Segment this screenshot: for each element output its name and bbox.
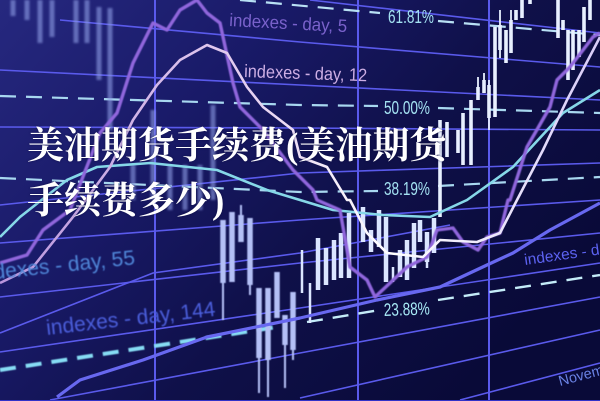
label: indexes day 12: indexes - day, 12 xyxy=(244,61,367,85)
candlesticks centre xyxy=(302,207,434,323)
label: 61.81%: 61.81% xyxy=(388,7,434,27)
bottom edge line xyxy=(0,400,600,401)
title: 美油期货手续费(美油期货手续费多少) xyxy=(27,126,446,222)
label: 23.88%: 23.88% xyxy=(383,298,430,320)
line: day 200 blue trend xyxy=(57,203,600,397)
label: indexes day 5: indexes - day, 5 xyxy=(229,10,348,36)
line: day 5 purple xyxy=(0,0,600,297)
label: 38.19%: 38.19% xyxy=(384,179,430,199)
line: day 12 pink xyxy=(0,37,600,283)
label: indexes day 144: indexes - day, 144 xyxy=(45,298,217,340)
candlesticks upper right xyxy=(440,0,590,217)
label: 50.00%: 50.00% xyxy=(384,98,430,118)
line: day 55 cyan xyxy=(0,90,600,237)
candlesticks lower left xyxy=(223,205,293,397)
faded candlesticks left xyxy=(13,0,213,210)
